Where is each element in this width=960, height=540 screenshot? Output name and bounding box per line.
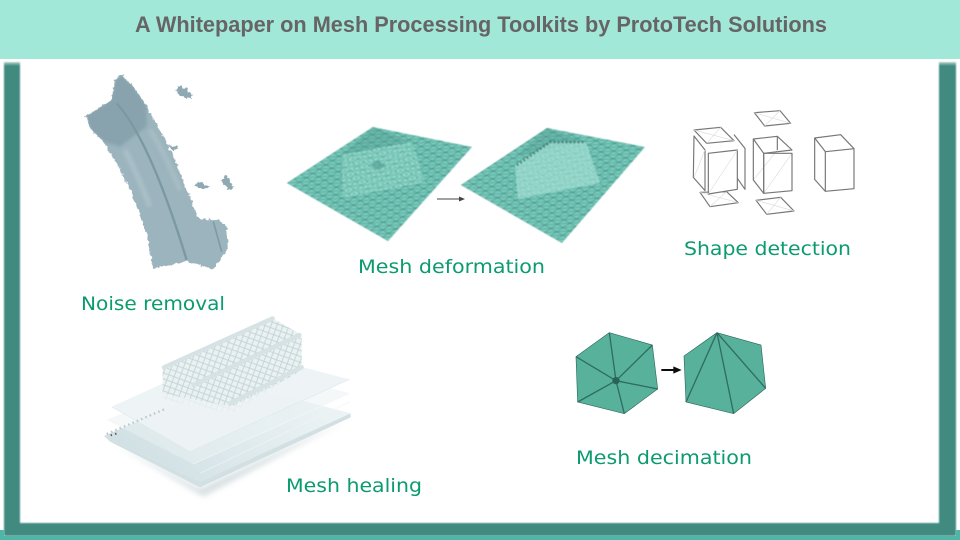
exploded box: [693, 127, 745, 207]
illustration: shape detection: [693, 111, 854, 214]
title: A Whitepaper on Mesh Processing Toolkits by ProtoTech Solutions: [135, 12, 827, 37]
top layer back: [112, 350, 349, 452]
illustration: mesh decimation: [576, 333, 766, 414]
solid box: [815, 135, 854, 191]
arrow: [661, 366, 682, 374]
label: noise removal: Noise removal: [81, 293, 225, 315]
illustration: mesh healing: [104, 318, 351, 497]
label: mesh decimation: Mesh decimation: [576, 447, 752, 469]
bottom plate: [104, 382, 351, 482]
label: shape detection: Shape detection: [684, 238, 851, 260]
middle layers: [107, 363, 350, 464]
label: mesh healing: Mesh healing: [286, 475, 422, 497]
mesh after: [461, 128, 645, 243]
bar top fade: [0, 59, 960, 66]
hexagon after: [684, 333, 766, 414]
arrow: [437, 196, 465, 202]
label: mesh deformation: Mesh deformation: [358, 256, 545, 278]
lattice: [163, 318, 302, 413]
hexagon before: [576, 333, 658, 414]
mesh before: [287, 127, 472, 241]
bottom strip: [0, 530, 960, 540]
illustration: noise removal: [86, 75, 234, 270]
top layer front: [112, 372, 349, 452]
box with loose faces: [753, 111, 794, 214]
header band: [0, 0, 960, 59]
illustration: mesh deformation: [287, 127, 645, 243]
